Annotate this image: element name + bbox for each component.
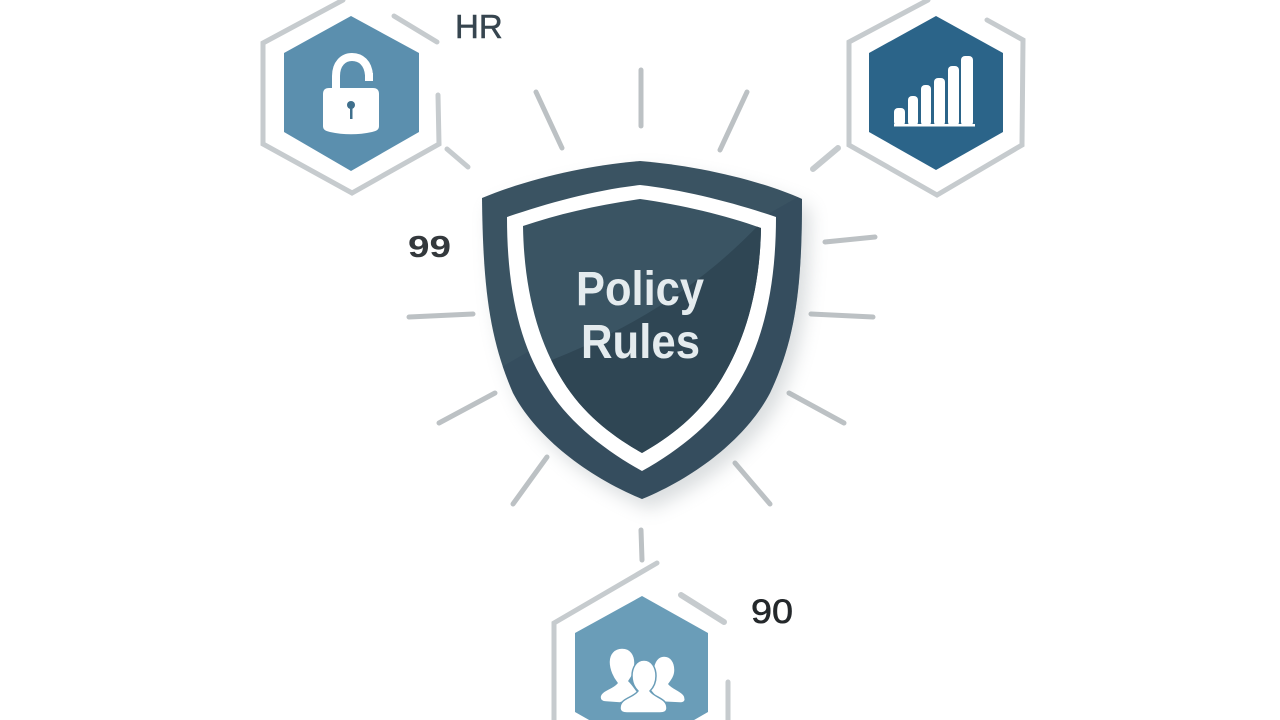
shield label xyxy=(576,263,704,369)
icon: group of people xyxy=(600,648,685,713)
shield inner shade xyxy=(551,226,761,453)
hexagon ring xyxy=(554,563,728,720)
shield white ring xyxy=(507,185,776,471)
icon: rising bars xyxy=(894,56,975,126)
label: 99: 99 xyxy=(408,229,451,264)
label: 90: 90 xyxy=(751,593,793,631)
infographic xyxy=(260,0,1026,720)
shield shadow xyxy=(490,171,810,509)
hexagon fill xyxy=(284,16,419,171)
label: HR: HR xyxy=(455,8,503,45)
hexagon ring xyxy=(813,0,1023,195)
shield label: Policy xyxy=(576,263,704,316)
radiating rays xyxy=(409,70,875,560)
hexagon node: people xyxy=(554,563,728,720)
hexagon fill xyxy=(575,596,708,720)
hexagon node: lock xyxy=(263,0,468,193)
hexagon node: bar chart xyxy=(813,0,1023,195)
icon: open padlock xyxy=(323,57,379,134)
shield: Policy Rules xyxy=(470,161,810,510)
shield outer body xyxy=(482,161,802,499)
shield lower shade xyxy=(502,197,802,499)
shield inner panel xyxy=(523,199,761,453)
hexagon fill xyxy=(869,16,1003,170)
hexagon ring xyxy=(263,0,468,193)
shield label: Rules xyxy=(581,316,700,369)
